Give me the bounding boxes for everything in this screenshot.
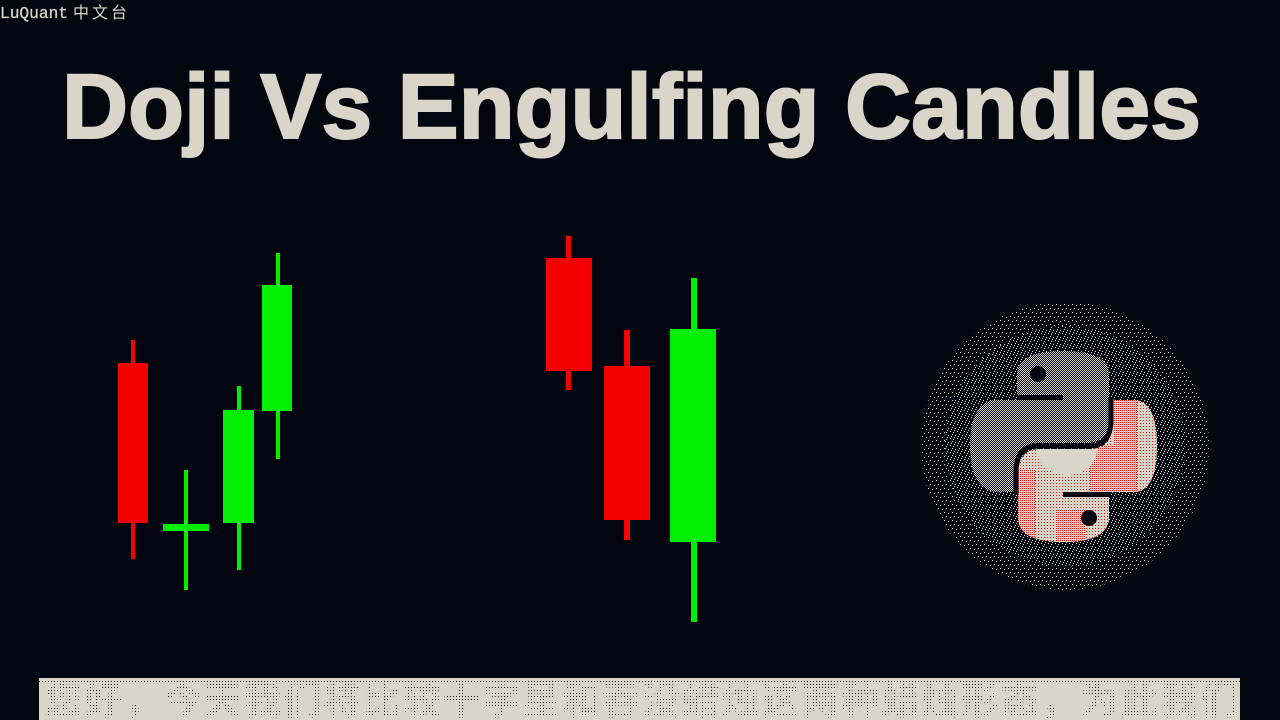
python upper snake [970, 351, 1109, 492]
chart: doji candle pattern [118, 253, 292, 590]
chart: engulfing candle pattern [546, 236, 716, 622]
dotted halo outer [921, 302, 1209, 590]
candle: red first [546, 236, 592, 390]
candle: green engulfing [670, 278, 716, 622]
python centre gap [1016, 398, 1111, 494]
candle: green bullish [223, 386, 254, 570]
candle: red bearish [118, 340, 148, 559]
channel label: LuQuant [0, 5, 68, 24]
icon: python logo with dotted halo [921, 302, 1209, 590]
title: Doji Vs Engulfing Candles [62, 56, 1201, 158]
candle: green bullish tall [262, 253, 292, 459]
candle: red second [604, 330, 650, 540]
dotted halo inner [945, 326, 1185, 566]
candle: green doji [163, 470, 209, 590]
subtitle bar [39, 678, 1240, 720]
channel label [0, 4, 127, 24]
python eye upper [1030, 366, 1046, 382]
python lower snake [1018, 400, 1157, 542]
python eye lower [1081, 510, 1097, 526]
channel label: 中文台 [73, 4, 127, 22]
